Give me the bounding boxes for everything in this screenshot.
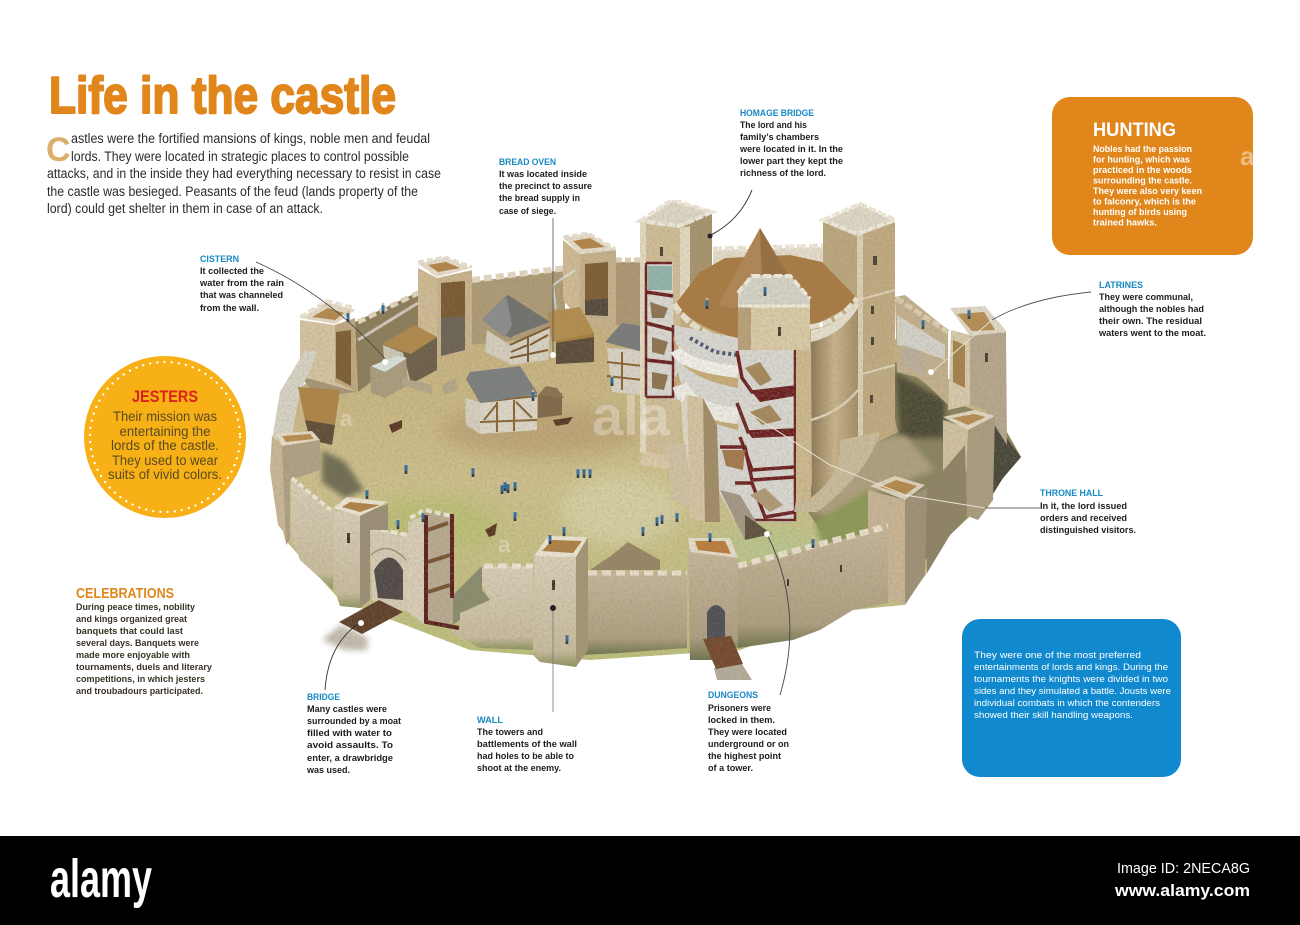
figures on the ground and walls: [346, 285, 970, 644]
dungeon entrance: [745, 515, 772, 540]
left stairs and thatched shed: [272, 350, 340, 445]
panel: celebrations: and troubadours participated.: [76, 685, 203, 696]
panel: tournaments: showed their skill handling weapons.: [974, 710, 1133, 721]
bread oven thatched bakery: [548, 270, 594, 364]
panel: hunting: surrounding the castle.: [1093, 176, 1192, 186]
conical roof: [718, 228, 787, 308]
label: throne hall: orders and received: [1040, 512, 1127, 523]
title: Life in the castle: [49, 67, 396, 125]
wall north of gate: [291, 478, 333, 590]
panel: hunting: a: [1240, 141, 1255, 171]
panel: hunting: to falconry, which is the: [1093, 196, 1196, 206]
label: bread oven: case of siege.: [499, 205, 556, 216]
keep: [638, 200, 898, 540]
front keep tower K3: [738, 275, 818, 512]
roof terrace: [674, 246, 857, 343]
right wall: [925, 445, 967, 573]
rocky mound and dark ground behind the keep: [800, 360, 1021, 560]
timber house 2: [465, 366, 538, 434]
panel: celebrations: CELEBRATIONS: [76, 585, 174, 602]
keep round body: [795, 298, 880, 510]
image watermark: a: [340, 406, 353, 431]
label: cistern: CISTERN: [200, 254, 239, 264]
label: cistern: that was channeled: [200, 289, 283, 300]
label: throne hall: In it, the lord issued: [1040, 500, 1127, 511]
label: bridge: BRIDGE: [307, 692, 340, 702]
right rear wall: [895, 295, 948, 405]
cross-section of the keep: [646, 263, 795, 540]
panel: hunting: practiced in the woods: [1093, 165, 1192, 175]
panel: hunting: Nobles had the passion: [1093, 144, 1192, 154]
callout line: cistern: [256, 262, 388, 365]
label: latrines: waters went to the moat.: [1098, 327, 1206, 338]
label: homage bridge: lower part they kept the: [740, 155, 843, 166]
front wall west: [450, 566, 533, 650]
callout line: bread oven: [550, 218, 556, 358]
gatehouse: [370, 528, 408, 612]
label: latrines: LATRINES: [1099, 280, 1143, 290]
label: dungeons: the highest point: [708, 750, 781, 761]
footer logo: alamy: [50, 849, 152, 909]
callout line: latrines: [928, 292, 1091, 375]
castle illustration: [270, 200, 1021, 680]
small fore-tower: [666, 395, 720, 522]
panel: tournaments: sides and they simulated a battle. Jousts were: [974, 686, 1171, 697]
latrine tower R: [948, 306, 1007, 445]
drawbridge east: [703, 636, 752, 680]
label: dungeons: DUNGEONS: [708, 690, 758, 700]
teal upper chamber: [648, 266, 672, 290]
rear wall: [355, 260, 645, 392]
label: bridge: avoid assaults. To: [307, 739, 393, 750]
drawbridge west: [322, 600, 403, 650]
panel: hunting: hunting of birds using: [1093, 207, 1187, 217]
label: cistern: water from the rain: [199, 277, 284, 288]
label: wall: [477, 715, 577, 773]
panel: hunting: for hunting, which was: [1093, 154, 1190, 164]
label: throne hall: THRONE HALL: [1040, 488, 1104, 498]
label: homage bridge: HOMAGE BRIDGE: [740, 108, 814, 118]
panel: tournaments: [962, 619, 1181, 777]
label: cistern: from the wall.: [200, 302, 259, 313]
label: throne hall: distinguished visitors.: [1040, 524, 1136, 535]
rear tower B: [418, 257, 472, 358]
panel: jesters: lords of the castle.: [111, 438, 219, 453]
jesters heading: JESTERS: [132, 387, 198, 406]
section tower: [408, 510, 459, 628]
intro paragraph: lords. They were located in strategic places to control possible: [71, 149, 409, 164]
panel: celebrations: tournaments, duels and literary: [76, 661, 213, 672]
panel: hunting: They were also very keen: [1093, 186, 1202, 196]
panel: celebrations: [76, 585, 213, 696]
rear tower A: [300, 301, 357, 395]
low walls by cistern: [402, 378, 458, 395]
panel: jesters: [84, 356, 246, 518]
label: throne hall: [1040, 488, 1136, 535]
image watermark: [340, 384, 671, 557]
label: dungeons: Prisoners were: [708, 702, 771, 713]
panel: hunting: [1052, 97, 1255, 255]
drop cap: C: [46, 131, 71, 169]
label: cistern: [199, 254, 284, 313]
site url: www.alamy.com: [1114, 882, 1250, 900]
gate tower F1: [333, 497, 388, 608]
rear left tower L: [270, 431, 320, 545]
panel: celebrations: several days. Banquets were: [76, 637, 199, 648]
panel: jesters: entertaining the: [120, 424, 210, 439]
label: wall: The towers and: [477, 726, 543, 737]
panel: celebrations: During peace times, nobility: [76, 601, 196, 612]
callout line: dungeons: [764, 531, 790, 695]
callout line: throne hall: [745, 410, 1040, 508]
label: wall: WALL: [477, 715, 504, 725]
shaded court behind wall: [453, 566, 490, 625]
callout line: bridge: [325, 620, 364, 690]
panel: tournaments: entertainments of lords and kings. During the: [974, 662, 1168, 673]
footer bar: [0, 836, 1300, 925]
rear tower C: [563, 233, 616, 332]
label: bridge: surrounded by a moat: [307, 715, 401, 726]
tower F2 (wall tower): [533, 536, 588, 667]
image watermark: ala: [592, 384, 671, 447]
image id: Image ID: 2NECA8G: [1117, 860, 1250, 877]
small hut: [538, 386, 564, 418]
panel: jesters: suits of vivid colors.: [108, 467, 222, 482]
callout line: wall: [550, 605, 556, 712]
panel: tournaments: They were one of the most preferred: [974, 650, 1141, 661]
cistern: [370, 356, 408, 398]
label: bread oven: the bread supply in: [499, 192, 580, 203]
panel: celebrations: banquets that could last: [76, 625, 183, 636]
front wall centre: [582, 542, 687, 655]
label: cistern: It collected the: [200, 265, 264, 276]
panel: celebrations: and kings organized great: [76, 613, 187, 624]
label: latrines: their own. The residual: [1099, 315, 1202, 326]
label: homage bridge: The lord and his: [740, 119, 807, 130]
label: wall: battlements of the wall: [477, 738, 577, 749]
label: dungeons: locked in them.: [708, 714, 775, 725]
intro paragraph: astles were the fortified mansions of kings, noble men and feudal: [71, 131, 430, 146]
label: wall: had holes to be able to: [477, 750, 574, 761]
intro paragraph: [46, 131, 441, 216]
timber house 1: [482, 295, 550, 365]
label: bridge: [306, 692, 401, 775]
label: bridge: was used.: [306, 764, 350, 775]
label: latrines: They were communal,: [1099, 291, 1193, 302]
panel: hunting: HUNTING: [1093, 120, 1176, 141]
label: bread oven: the precinct to assure: [499, 180, 592, 191]
label: dungeons: underground or on: [708, 738, 789, 749]
panel: hunting: trained hawks.: [1093, 218, 1157, 228]
label: bridge: filled with water to: [307, 727, 392, 738]
shadow beside the left tower: [322, 450, 364, 498]
callout line: homage bridge: [708, 190, 752, 238]
ground shading: [360, 404, 830, 563]
keep tower K1: [638, 200, 712, 472]
panel: jesters: They used to wear: [112, 453, 219, 468]
label: homage bridge: richness of the lord.: [740, 167, 826, 178]
label: homage bridge: were located in it. In the: [739, 143, 843, 154]
intro paragraph: the castle was besieged. Peasants of the feud (lands property of the: [47, 184, 418, 199]
right tower R3: [868, 476, 927, 605]
label: dungeons: of a tower.: [708, 762, 753, 773]
ground: [270, 300, 1021, 660]
label: dungeons: They were located: [708, 726, 787, 737]
timber house 3: [605, 323, 643, 395]
label: latrines: [1098, 280, 1206, 338]
label: bread oven: It was located inside: [499, 168, 587, 179]
label: bread oven: [499, 157, 592, 216]
panel: tournaments: individual combats in which the contenders: [974, 698, 1160, 709]
curved floors: [673, 334, 738, 388]
stepped red floors: [720, 351, 795, 517]
label: dungeons: [708, 690, 789, 773]
panel: celebrations: competitions, in which jesters: [76, 673, 205, 684]
label: homage bridge: family’s chambers: [740, 131, 819, 142]
label: bread oven: BREAD OVEN: [499, 157, 556, 167]
intro paragraph: lord) could get shelter in them in case of an attack.: [47, 201, 323, 216]
label: homage bridge: [739, 108, 843, 178]
label: latrines: although the nobles had: [1099, 303, 1204, 314]
panel: celebrations: made more enjoyable with: [76, 649, 190, 660]
intro paragraph: attacks, and in the inside they had everything necessary to resist in case: [47, 166, 441, 181]
stairway: [720, 490, 758, 540]
panel: jesters: Their mission was: [113, 409, 217, 424]
image watermark: a: [498, 532, 511, 557]
label: wall: shoot at the enemy.: [477, 762, 561, 773]
gate tower F3: [688, 538, 738, 660]
house with thatched shelter (near cistern): [382, 325, 437, 384]
label: bridge: enter, a drawbridge: [307, 752, 393, 763]
front wall east: [738, 526, 888, 648]
right tower R2: [943, 410, 995, 520]
keep tower K2: [823, 204, 898, 452]
label: bridge: Many castles were: [307, 703, 387, 714]
panel: tournaments: tournaments the knights were divided in two: [974, 674, 1168, 685]
